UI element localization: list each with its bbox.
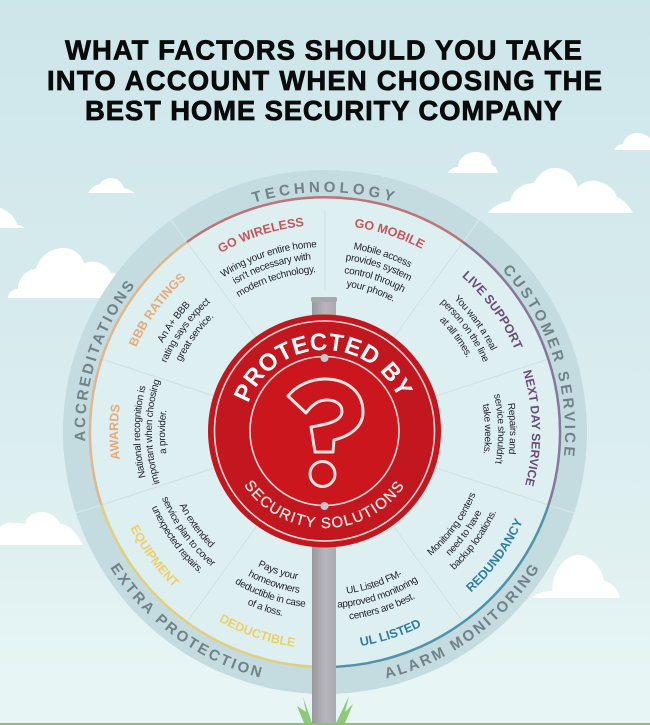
segment: deductible: DEDUCTIBLE [219, 614, 296, 647]
segment: bbb ratings: great service. [177, 316, 214, 362]
segment: awards: National recognition is [133, 386, 146, 478]
segment: redundancy [426, 492, 522, 592]
outer ring [63, 170, 587, 694]
segment: equipment [130, 496, 216, 586]
segment: redundancy: need to have [444, 508, 485, 558]
ground line [0, 723, 650, 725]
ring labels: ALARM MONITORING [386, 565, 538, 678]
section dividers [76, 210, 574, 622]
segment: go wireless [218, 218, 316, 297]
segment: redundancy: backup locations. [449, 509, 499, 572]
segment: equipment: unexpected repairs. [152, 506, 201, 574]
segment: live support: person on the line [439, 299, 488, 362]
segment: live support [439, 270, 523, 362]
segment: awards: a provider. [158, 410, 168, 454]
ring labels: CUSTOMER SERVICE [504, 265, 576, 456]
segment: go wireless: Wiring your entire home [220, 242, 316, 276]
segment: awards: important when choosing [144, 379, 162, 485]
title: WHAT FACTORS SHOULD YOU TAKE [65, 34, 582, 66]
title: BEST HOME SECURITY COMPANY [85, 95, 562, 126]
segment: next day service: service shouldn't [494, 394, 506, 464]
title [47, 34, 602, 126]
grass [297, 696, 353, 723]
segment: ul listed [338, 571, 420, 646]
clouds [0, 133, 650, 598]
segment: bbb ratings: rating says expect [162, 298, 210, 362]
ring labels: EXTRA PROTECTION [110, 562, 262, 678]
wheel [63, 170, 587, 694]
segment: deductible: homeowners [248, 570, 300, 593]
sign post [311, 297, 337, 723]
segment: bbb ratings: An A+ BBB [158, 302, 190, 344]
segment: next day service [482, 370, 540, 486]
icon: question mark [288, 379, 363, 486]
segment: go mobile: GO MOBILE [355, 219, 426, 249]
segment: next day service: Repairs and [507, 403, 518, 454]
segment: bbb ratings: BBB RATINGS [128, 274, 185, 347]
ring labels: TECHNOLOGY [251, 182, 395, 202]
segment: deductible: Pays your [258, 560, 298, 579]
segment: go wireless: GO WIRELESS [218, 218, 304, 252]
coloured arcs [90, 197, 560, 667]
segment: bbb ratings [128, 274, 214, 362]
segment: awards [109, 379, 168, 485]
screws [320, 354, 328, 362]
segment: deductible [219, 560, 306, 647]
segment: live support: at all times. [440, 318, 470, 358]
segment: go mobile: Mobile access [354, 242, 412, 267]
sign [208, 314, 441, 548]
segment: equipment: service plan to cover [162, 496, 216, 566]
segment: ul listed: approved monitoring [337, 575, 420, 611]
segment: next day service: NEXT DAY SERVICE [523, 370, 540, 486]
segment: next day service: take weeks. [482, 404, 492, 454]
segment: deductible: deductible in case [236, 578, 306, 607]
segment: equipment: An extended [179, 504, 216, 548]
segment: redundancy: Monitoring centers [425, 491, 479, 558]
segment: go wireless: isn't necessary with [232, 252, 310, 284]
segment: go mobile [344, 219, 426, 302]
segment: live support: LIVE SUPPORT [462, 270, 523, 348]
segment: ul listed: centers are best. [348, 591, 417, 622]
title: INTO ACCOUNT WHEN CHOOSING THE [47, 65, 602, 96]
segment: go mobile: your phone. [346, 281, 394, 302]
inner disc [90, 197, 560, 667]
protected by: PROTECTED BY [229, 329, 418, 406]
security solutions: SECURITY SOLUTIONS [241, 477, 408, 532]
segment: ul listed: UL LISTED [360, 620, 420, 646]
segment: live support: You want a real [456, 294, 498, 350]
segment: ul listed: UL Listed FM- [346, 568, 404, 597]
segment: equipment: EQUIPMENT [130, 524, 180, 586]
segment: redundancy: REDUNDANCY [463, 516, 526, 595]
segment: awards: AWARDS [109, 404, 120, 460]
segment: go mobile: provides system [346, 255, 412, 281]
segment: deductible: of a loss. [248, 600, 282, 616]
segment: go mobile: control through [344, 268, 405, 292]
ring labels [74, 182, 576, 678]
segment: go wireless: modern technology. [236, 267, 316, 297]
ring labels: ACCREDITATIONS [74, 281, 134, 441]
